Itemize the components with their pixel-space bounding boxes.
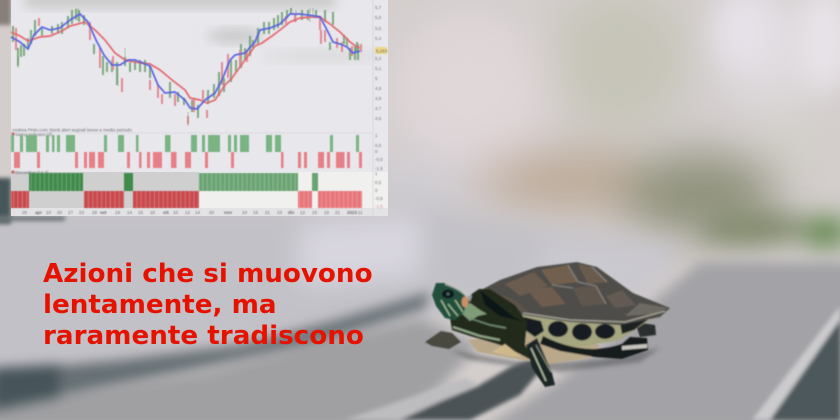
time axis: 20	[209, 210, 215, 215]
neck and forelimb	[450, 289, 555, 387]
price axis: 0,5	[375, 180, 382, 185]
time axis: 19	[324, 210, 330, 215]
headline: lentamente, ma	[43, 290, 277, 320]
time axis: 29	[92, 210, 98, 215]
price axis	[373, 0, 388, 216]
price axis: 1	[375, 171, 378, 176]
moving average: red	[11, 17, 360, 103]
foreground plank edges	[345, 306, 840, 420]
headline	[43, 259, 373, 351]
price axis: 0,5	[375, 143, 382, 148]
price wicks	[18, 8, 313, 126]
garden blur	[370, 0, 830, 237]
indicator title: Stocastica [14,3]	[15, 170, 48, 175]
plastron	[468, 332, 600, 364]
time axis: 23	[79, 210, 85, 215]
time axis: 10	[46, 210, 52, 215]
stochastic bars	[11, 173, 362, 208]
price axis: -1,5	[375, 204, 383, 209]
price axis: 5,4	[375, 36, 382, 41]
price axis: 1	[375, 133, 378, 138]
garden highlights and greenery	[700, 0, 840, 248]
time axis: 15	[138, 210, 144, 215]
price axis: -0,5	[375, 196, 383, 201]
time axis: 14	[195, 210, 201, 215]
time axis: 15	[312, 210, 318, 215]
price axis: 5,7	[375, 5, 382, 10]
candlesticks	[13, 8, 361, 124]
far bench plank	[0, 205, 690, 400]
shell underside: cream marginal scutes with dark spots	[522, 315, 652, 359]
time axis: 21	[335, 210, 341, 215]
time axis: 23	[277, 210, 283, 215]
time axis: dic	[288, 210, 295, 215]
time axis: set	[100, 210, 107, 215]
time axis: 12	[185, 210, 191, 215]
price axis: 5,1	[375, 66, 382, 71]
headline: Azioni che si muovono	[43, 259, 373, 289]
indicator title: Swing Indicator [3]	[15, 132, 52, 137]
time axis: 15	[253, 210, 259, 215]
price axis: 4,7	[375, 106, 382, 111]
rear legs	[425, 322, 656, 349]
head	[432, 282, 472, 320]
price axis: 4,8	[375, 96, 382, 101]
time axis: 21	[265, 210, 271, 215]
time axis: nov	[224, 210, 232, 215]
price axis: 4,6	[375, 116, 382, 121]
swing indicator bars	[11, 135, 362, 168]
time axis: 10	[242, 210, 248, 215]
time axis: 14	[127, 210, 133, 215]
price axis: 5	[375, 76, 378, 81]
time axis: 10	[173, 210, 179, 215]
price axis: 5,5	[375, 26, 382, 31]
time axis: 20	[57, 210, 63, 215]
price axis: 5,263	[376, 48, 388, 54]
lower bench plank	[0, 262, 840, 420]
time axis: apr	[35, 210, 42, 215]
time axis: 16	[150, 210, 156, 215]
headline: raramente tradiscono	[43, 321, 364, 351]
shadow gap between planks	[0, 292, 430, 412]
time axis: 25	[22, 210, 28, 215]
left photo strip	[0, 0, 65, 224]
time axis: ott	[163, 210, 169, 215]
moving average: blue	[11, 14, 360, 109]
time axis: 2023	[347, 210, 358, 215]
price axis: -0,5	[375, 157, 383, 162]
time axis: 12	[300, 210, 306, 215]
time axis: 11	[358, 210, 363, 215]
indicator title: Andrea Pinto.com Stock alert segnali breve e medio periodo	[12, 128, 132, 132]
price axis: 5,2	[375, 56, 382, 61]
time axis	[22, 210, 363, 215]
carapace	[483, 262, 670, 325]
contact shadow	[450, 348, 660, 372]
price axis: 0	[375, 188, 378, 193]
time axis: 19	[115, 210, 121, 215]
price axis: 4,9	[375, 86, 382, 91]
price axis: 5,6	[375, 15, 382, 20]
indicator title	[11, 128, 373, 175]
price axis: -1,5	[375, 166, 383, 171]
time axis: 27	[68, 210, 74, 215]
price axis: 0	[375, 149, 378, 154]
